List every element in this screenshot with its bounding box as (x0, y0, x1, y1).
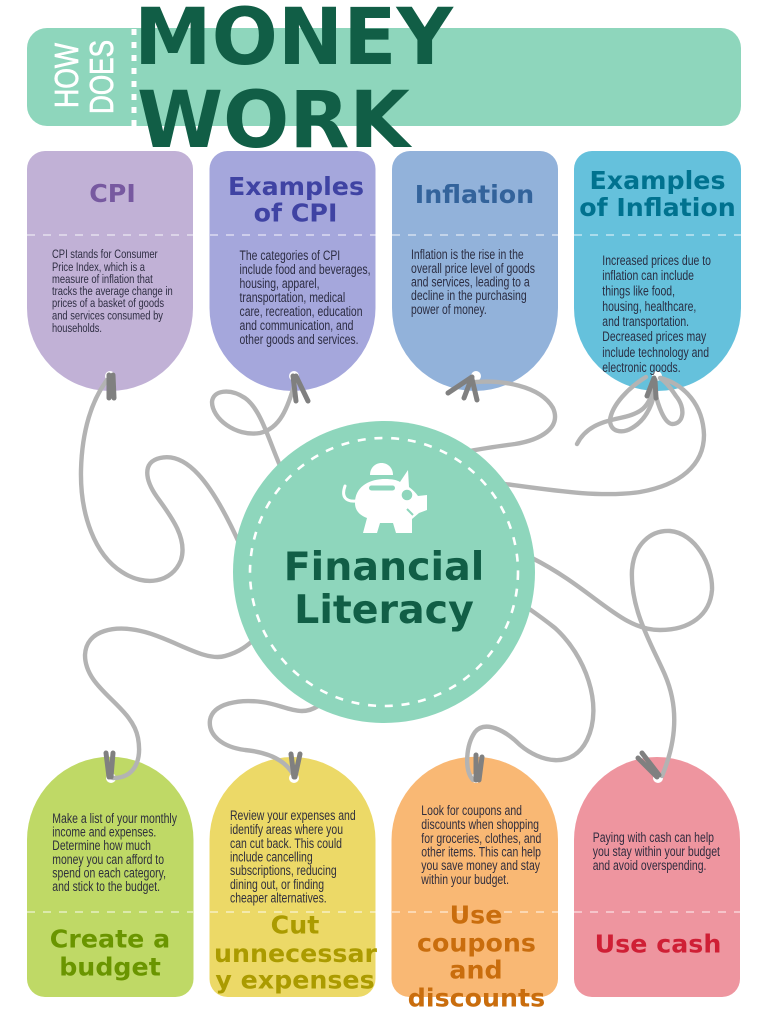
heading: financial literacy: Literacy (294, 587, 474, 633)
clip: Examples of CPI (293, 376, 308, 401)
panel: Use coupons and discounts: within your budget. (421, 872, 509, 887)
panel: Examples of Inflation: housing, healthcare, (602, 299, 696, 314)
panel: Inflation: Inflation (415, 180, 534, 209)
panel: Inflation: decline in the purchasing (411, 288, 527, 303)
panel: Use cash (574, 757, 740, 997)
panel: header banner (27, 28, 741, 127)
panel: Inflation: power of money. (411, 302, 487, 317)
panel: Examples of CPI: Examples (228, 172, 364, 201)
heading: financial literacy: Financial (284, 544, 484, 590)
panel: Use cash: and avoid overspending. (593, 858, 706, 873)
panel: Create a budget: Determine how much (52, 838, 151, 853)
panel: Examples of Inflation: include technology and (602, 345, 709, 360)
panel: CPI (27, 151, 193, 391)
panel: CPI: Price Index, which is a (52, 260, 145, 274)
panel: Cut unnecessary expenses: cheaper alternatives. (230, 890, 327, 906)
panel: Use coupons and discounts: Use (450, 900, 502, 930)
title: money work: WORK (137, 76, 412, 166)
panel: Examples of Inflation: things like food, (602, 284, 675, 298)
panel: Use cash: Use cash (595, 930, 721, 958)
panel: Cut unnecessary expenses: Cut (271, 910, 319, 940)
panel: CPI: households. (52, 321, 102, 335)
panel: Examples of CPI: and communication, and (240, 318, 354, 333)
panel: Cut unnecessary expenses: dining out, or finding (230, 877, 324, 892)
icon: piggy bank (344, 463, 427, 533)
panel: Examples of CPI: transportation, medical (240, 290, 345, 305)
panel: Cut unnecessary expenses: y expenses (215, 966, 375, 994)
string: Create a budget to centre (85, 629, 256, 778)
clip: Cut unnecessary expenses (291, 754, 300, 777)
clip: Use coupons and discounts (476, 755, 482, 780)
panel: Create a budget (27, 757, 194, 997)
panel: CPI: CPI stands for Consumer (52, 247, 158, 261)
panel: Examples of Inflation: of Inflation (579, 193, 736, 222)
panel: Create a budget: spend on each category, (52, 866, 166, 880)
panel: Use coupons and discounts: other items. This can help (421, 844, 541, 860)
panel: Examples of CPI: housing, apparel, (240, 276, 320, 291)
panel: Examples of CPI (210, 151, 376, 391)
panel: Examples of Inflation: Increased prices due to (602, 253, 711, 268)
clip: Examples of Inflation (647, 378, 656, 398)
panel: Use coupons and discounts: discounts when shopping (421, 817, 539, 832)
heading: how does: HOW (49, 43, 86, 108)
string: Examples of CPI to centre (212, 380, 296, 470)
panel: Create a budget: and stick to the budget. (52, 879, 160, 894)
panel: Cut unnecessary expenses: include cancelling (230, 850, 313, 864)
panel: Cut unnecessary expenses: identify areas where you (230, 822, 343, 837)
panel: CPI: measure of inflation that (52, 272, 153, 286)
panel: Use cash: you stay within your budget (593, 844, 720, 859)
panel: CPI: and services consumed by (52, 308, 164, 322)
panel: Cut unnecessary expenses (210, 757, 378, 997)
panel: Examples of Inflation: inflation can include (602, 268, 694, 283)
heading: financial literacy (284, 544, 484, 633)
clip: CPI (109, 375, 114, 398)
panel: Use coupons and discounts (392, 757, 558, 1012)
clip: Create a budget (106, 753, 113, 777)
panel: Examples of Inflation: and transportation. (602, 314, 689, 329)
panel: Examples of Inflation (574, 151, 741, 391)
panel: Cut unnecessary expenses: can cut back. This could (230, 836, 342, 851)
panel: Use coupons and discounts: Look for coupons and (421, 803, 522, 818)
panel: Inflation: Inflation is the rise in the (411, 247, 524, 262)
string: Examples of Inflation to centre (505, 377, 704, 494)
heading: how does (49, 40, 121, 114)
panel: Inflation (392, 151, 558, 391)
clip: Use cash (638, 753, 659, 777)
panel: Examples of CPI: care, recreation, education (240, 304, 362, 319)
panel: Examples of Inflation: Decreased prices may (602, 329, 706, 344)
panel: Create a budget: money you can afford to (52, 852, 164, 867)
panel: Examples of Inflation: electronic goods. (602, 360, 681, 375)
panel: Cut unnecessary expenses: subscriptions, reducing (230, 863, 337, 878)
panel: Cut unnecessary expenses: unnecessar (214, 939, 378, 968)
panel: Use coupons and discounts: for groceries, clothes, and (421, 831, 541, 846)
string: Cut unnecessary expenses to centre (210, 662, 330, 776)
panel: Examples of CPI: The categories of CPI (240, 248, 340, 263)
panel: Use coupons and discounts: discounts (408, 984, 545, 1012)
clip: Inflation (448, 377, 477, 400)
panel: CPI: CPI (89, 179, 136, 208)
panel: Examples of CPI: include food and beverages, (240, 262, 370, 277)
panel: CPI: prices of a basket of goods (52, 296, 164, 310)
panel: Inflation: overall price level of goods (411, 261, 535, 276)
panel: Use coupons and discounts: and (449, 956, 503, 984)
panel: Examples of Inflation: Examples (589, 166, 726, 195)
heading: how does: DOES (84, 40, 121, 114)
panel: Create a budget: budget (59, 952, 161, 982)
panel: CPI: tracks the average change in (52, 284, 173, 298)
panel: Cut unnecessary expenses: Review your expenses and (230, 808, 356, 823)
panel: Use coupons and discounts: you save money and stay (421, 858, 540, 873)
panel: central circle (233, 421, 535, 723)
panel: Examples of CPI: other goods and services. (240, 332, 358, 347)
string: Inflation to centre (470, 382, 555, 451)
panel: Inflation: and services, leading to a (411, 274, 530, 290)
string: Use cash to centre (532, 531, 712, 776)
panel: Examples of CPI: of CPI (254, 198, 337, 228)
panel: Use cash: Paying with cash can help (593, 830, 714, 845)
panel: Create a budget: income and expenses. (52, 824, 156, 840)
title: money work (134, 0, 454, 166)
panel: Use coupons and discounts: coupons (417, 928, 536, 958)
panel: Create a budget: Create a (50, 924, 170, 954)
string: CPI to centre (81, 380, 240, 581)
panel: Create a budget: Make a list of your monthly (52, 811, 177, 826)
string: Use coupons and discounts to centre (467, 608, 593, 780)
